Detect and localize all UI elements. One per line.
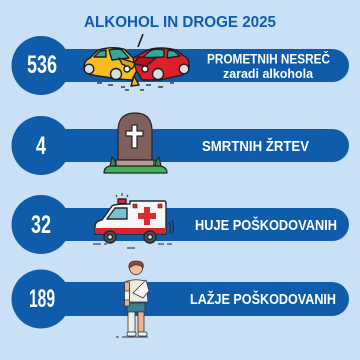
icon: crashed cars [84,34,189,90]
bar and number circle [12,36,349,95]
bar and number circle [12,195,349,254]
bar and number circle [12,270,349,328]
label: huje poškodovanih: HUJE POŠKODOVANIH [195,216,337,234]
row: traffic accidents [12,34,349,95]
number 536: 536 [27,51,57,79]
number 32: 32 [31,211,51,239]
icon: injured person [116,261,149,337]
label: lažje poškodovanih: LAŽJE POŠKODOVANIH [190,290,336,308]
label: prometnih nesreč [207,52,330,81]
label: prometnih nesreč: PROMETNIH NESREČ [207,52,330,66]
bar and number circle [12,116,349,175]
row: fatalities [12,113,349,175]
icon: gravestone [104,113,167,173]
label: smrtnih žrtev: SMRTNIH ŽRTEV [202,137,309,155]
row: lightly injured [12,261,349,337]
icon: ambulance [93,193,174,248]
title: ALKOHOL IN DROGE 2025 [84,14,276,31]
number 4: 4 [36,132,46,160]
row: seriously injured [12,193,349,254]
number 189: 189 [29,285,55,313]
label: prometnih nesreč: zaradi alkohola [223,66,314,81]
